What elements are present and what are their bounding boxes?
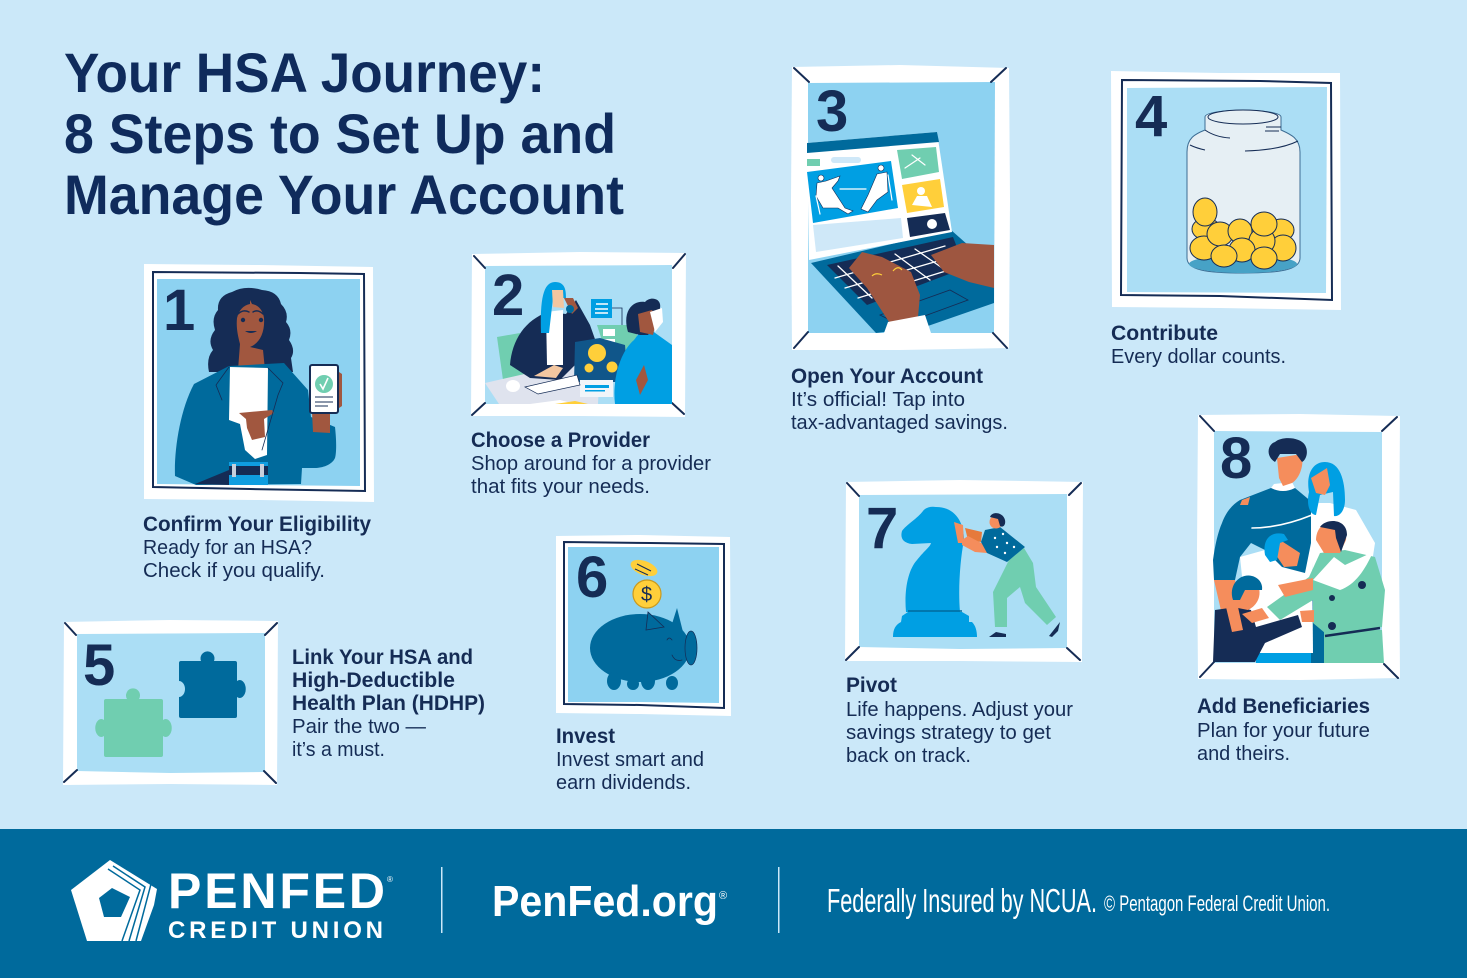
logo wordmark: PenFed Credit Union: PENFED bbox=[168, 863, 385, 919]
caption: contribute: Every dollar counts. bbox=[1111, 345, 1286, 368]
caption: pivot: Pivot bbox=[846, 674, 897, 697]
panel: step 3 open your account bbox=[791, 65, 1010, 434]
caption: invest: earn dividends. bbox=[556, 771, 691, 794]
caption: open your account bbox=[791, 365, 1008, 434]
caption: choose a provider: Shop around for a provider bbox=[471, 452, 711, 475]
logo wordmark: PenFed Credit Union: CREDIT UNION bbox=[168, 917, 383, 944]
number 1: 1 bbox=[163, 278, 195, 343]
title: Your HSA Journey: bbox=[64, 41, 545, 104]
caption: add beneficiaries: and theirs. bbox=[1197, 742, 1290, 765]
divider bbox=[441, 867, 442, 933]
illustration: woman pushing chess knight bbox=[893, 507, 1060, 637]
picture frame 3 bbox=[791, 65, 1010, 350]
caption: link your HSA and HDHP bbox=[292, 646, 485, 761]
illustration: woman holding phone bbox=[175, 288, 342, 485]
illustration: jar of coins bbox=[1187, 110, 1300, 273]
insurance statement: © Pentagon Federal Credit Union. bbox=[1104, 891, 1330, 916]
caption: contribute bbox=[1111, 322, 1286, 368]
illustration: provider consultation bbox=[485, 282, 672, 404]
caption: choose a provider bbox=[471, 429, 711, 498]
divider bbox=[778, 867, 780, 933]
panel: step 4 contribute bbox=[1111, 71, 1341, 368]
caption: open your account: tax-advantaged savings. bbox=[791, 411, 1008, 434]
number 4: 4 bbox=[1135, 84, 1167, 149]
caption: pivot bbox=[846, 674, 1073, 767]
picture frame 8 bbox=[1197, 414, 1400, 680]
caption: invest: Invest bbox=[556, 725, 615, 748]
panel: step 7 pivot bbox=[845, 480, 1083, 767]
illustration: family hugging bbox=[1213, 438, 1385, 663]
picture frame 1 bbox=[144, 264, 374, 502]
caption: add beneficiaries: Plan for your future bbox=[1197, 719, 1370, 742]
logo wordmark: PenFed Credit Union bbox=[168, 863, 393, 944]
caption: confirm your eligibility bbox=[143, 513, 371, 582]
caption: pivot: back on track. bbox=[846, 744, 971, 767]
picture frame 5 bbox=[63, 620, 278, 785]
number 7: 7 bbox=[866, 496, 898, 561]
caption: contribute: Contribute bbox=[1111, 322, 1218, 345]
panel: step 1 confirm your eligibility bbox=[143, 264, 374, 582]
caption: open your account: It’s official! Tap into bbox=[791, 388, 965, 411]
picture frame 7 bbox=[845, 480, 1083, 662]
picture frame 6 bbox=[556, 535, 731, 716]
caption: open your account: Open Your Account bbox=[791, 365, 983, 388]
caption: pivot: savings strategy to get bbox=[846, 721, 1051, 744]
website: ® bbox=[719, 890, 727, 902]
panel: step 6 invest bbox=[556, 535, 731, 794]
number 6: 6 bbox=[576, 545, 608, 610]
insurance statement: Federally Insured by NCUA. bbox=[827, 882, 1097, 919]
picture frame 2 bbox=[471, 252, 686, 417]
caption: invest bbox=[556, 725, 704, 794]
footer band bbox=[0, 829, 1467, 978]
caption: link your HSA and HDHP: High-Deductible bbox=[292, 669, 455, 692]
panel: step 8 add beneficiaries bbox=[1197, 414, 1400, 765]
caption: confirm your eligibility: Check if you qualify. bbox=[143, 559, 325, 582]
caption: invest: Invest smart and bbox=[556, 748, 704, 771]
caption: confirm your eligibility: Confirm Your Eligibility bbox=[143, 513, 371, 536]
illustration: piggy bank and coins: $ bbox=[641, 584, 652, 606]
caption: pivot: Life happens. Adjust your bbox=[846, 698, 1073, 721]
title: Manage Your Account bbox=[64, 163, 624, 226]
logo wordmark: PenFed Credit Union: ® bbox=[387, 875, 393, 884]
illustration: laptop with hands bbox=[807, 132, 994, 333]
picture frame 4 bbox=[1111, 71, 1341, 310]
caption: confirm your eligibility: Ready for an HSA? bbox=[143, 536, 312, 559]
caption: link your HSA and HDHP: it’s a must. bbox=[292, 738, 385, 761]
panel: step 2 choose a provider bbox=[471, 252, 711, 498]
panel: step 5 link your HSA bbox=[63, 620, 485, 785]
title bbox=[64, 41, 624, 226]
number 3: 3 bbox=[816, 79, 848, 144]
caption: add beneficiaries: Add Beneficiaries bbox=[1197, 695, 1370, 718]
illustration: piggy bank and coins bbox=[590, 557, 697, 690]
website: PenFed.org bbox=[492, 877, 718, 926]
illustration: puzzle pieces bbox=[95, 651, 246, 757]
number 5: 5 bbox=[83, 633, 115, 698]
title: 8 Steps to Set Up and bbox=[64, 102, 616, 165]
caption: link your HSA and HDHP: Link Your HSA and bbox=[292, 646, 473, 669]
number 2: 2 bbox=[492, 263, 524, 328]
logo: PenFed pentagon mark bbox=[71, 860, 157, 941]
caption: choose a provider: that fits your needs. bbox=[471, 475, 650, 498]
caption: add beneficiaries bbox=[1197, 695, 1370, 765]
caption: choose a provider: Choose a Provider bbox=[471, 429, 650, 452]
caption: link your HSA and HDHP: Health Plan (HDHP) bbox=[292, 692, 485, 715]
number 8: 8 bbox=[1220, 426, 1252, 491]
caption: link your HSA and HDHP: Pair the two — bbox=[292, 715, 426, 738]
